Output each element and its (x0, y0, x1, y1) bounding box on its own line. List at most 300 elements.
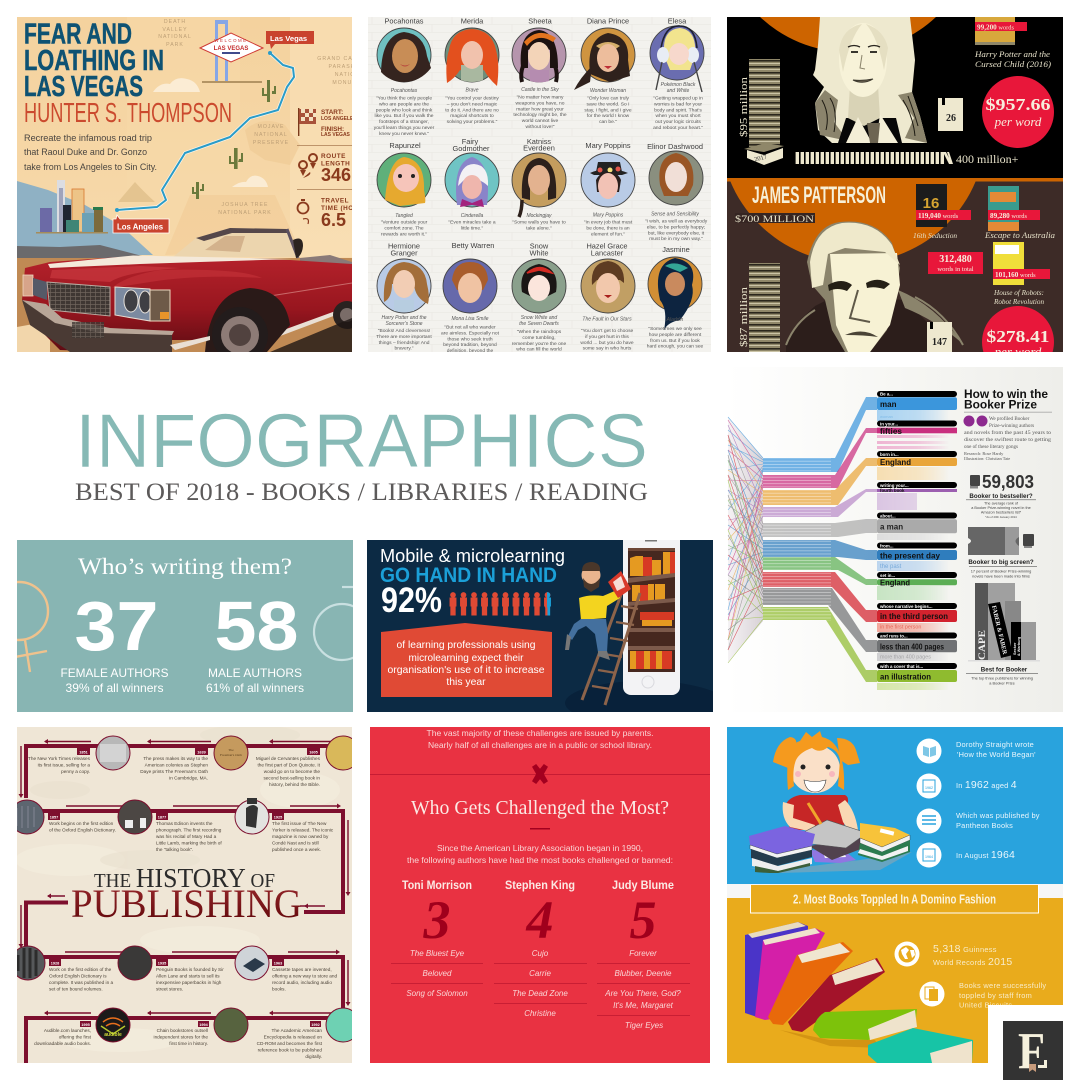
book stack: Rowling sales (794, 152, 1019, 166)
answer rows: and runs to... (880, 633, 908, 638)
intro: one of these literary gongs (964, 443, 1018, 450)
column: Judy Blume: Blubber, Deenie (615, 969, 672, 978)
record stats: toppled by staff from (959, 991, 1032, 1000)
wheel (205, 288, 290, 352)
quotes: must be in my own way." (649, 236, 703, 242)
film titles: Mockingjay (526, 213, 552, 219)
map labels: NATIONAL (158, 34, 192, 40)
answer rows: fourth book (880, 488, 905, 493)
map labels (158, 19, 358, 216)
character names: Godmother (453, 144, 490, 153)
answer rows: less than 400 pages (880, 642, 944, 652)
female count: 37 (74, 587, 158, 665)
year tags and events: street stores. (156, 986, 183, 992)
cacti (192, 80, 276, 199)
legend: stats: 6.5 (321, 210, 346, 230)
books: House of Robots: 101,160 words (995, 271, 1036, 279)
year tags and events: Cassette tapes are invented, (272, 967, 332, 972)
stat 59,803: Booker to bestseller? (969, 493, 1033, 500)
Mary Poppins (590, 169, 628, 175)
year tags and events: its first issue, selling for a (38, 762, 90, 768)
year tags and events: Little Lamb, marking the birth of (156, 840, 222, 846)
year tags and events: downloadable audio books. (34, 1041, 91, 1046)
year tags and events: The press makes its way to the (143, 756, 208, 761)
column: Toni Morrison (391, 880, 483, 998)
quotes: some say in who hurts (583, 346, 632, 352)
quotes: without love!" (526, 124, 555, 130)
publishers bar chart: a Booker Prize (989, 680, 1015, 686)
heading: Who Gets Challenged the Most? (411, 797, 669, 819)
film titles: Tangled (395, 213, 413, 219)
map labels: JOSHUA TREE (222, 202, 268, 208)
answer rows (877, 391, 957, 682)
title: FEAR AND (24, 18, 132, 50)
year tags and events: 1963 (274, 962, 282, 966)
answer rows: the present day (880, 552, 941, 560)
legend: stats: LAS VEGAS (321, 132, 351, 138)
Snow White (521, 264, 557, 296)
title: LAS VEGAS (24, 71, 143, 103)
quotes: can be." (599, 119, 617, 125)
legend: stats: START: (321, 109, 343, 116)
film titles: Snow White and (521, 315, 557, 321)
legend: stats: LENGTH (321, 160, 350, 168)
panel: The History of Publishing (17, 727, 352, 1063)
total words: 312,480 (939, 254, 972, 265)
character names: Snow (530, 242, 549, 250)
column: Judy Blume: Are You There, God? (604, 989, 681, 998)
answer rows: the past (880, 564, 902, 570)
year tags and events: Work on the first edition of the (49, 967, 112, 972)
route (117, 53, 294, 210)
year tags and events: inexpensive paperbacks in high (156, 980, 222, 985)
logo badge: F (1018, 1023, 1045, 1080)
per-word value: Patterson: per word (994, 344, 1042, 359)
publishers bar chart: Best for Booker (981, 666, 1028, 674)
callout: microlearning expect their (408, 653, 524, 664)
record stats: 5,318 Guinness (933, 943, 997, 955)
column: Stephen King: The Dead Zone (512, 989, 568, 998)
Diana Prince (589, 33, 630, 82)
film titles: Pokémon Black (661, 82, 696, 88)
film titles: Wonder Woman (590, 88, 626, 94)
quotes: things – friendship! And (379, 340, 430, 346)
quotes: you'll learn things you never (374, 125, 435, 131)
character names (384, 16, 703, 258)
toppling books (745, 922, 973, 1063)
column: Judy Blume: Forever (629, 949, 657, 958)
map labels: PARASH (329, 64, 355, 70)
answer rows: born in... (880, 452, 899, 457)
character names: Katniss (527, 137, 551, 146)
column: Judy Blume: It's Me, Margaret (613, 1001, 674, 1010)
character names: Granger (390, 248, 418, 258)
male count: 58 (214, 587, 298, 665)
money stack 2017 (739, 59, 784, 165)
year tags and events: Allen Lane and starts to sell its (156, 974, 220, 978)
fading alternative answers (877, 410, 946, 690)
map labels: MOJAVE (258, 124, 284, 130)
panel: The History of Publishing: The (228, 748, 234, 752)
character names: Fairy (462, 137, 479, 146)
quotes: – you don't need magic (447, 101, 498, 107)
quotes: if you get hurt in this (585, 334, 629, 340)
per-word value: Rowling: $957.66 (986, 95, 1050, 114)
panel: domino books (yellow) (727, 884, 1063, 1063)
quotes: to do it. And there are no (445, 107, 499, 113)
year tags and events: 1877 (158, 816, 166, 820)
female count: 39% of all winners (66, 681, 164, 695)
Las Vegas pin: Las Vegas (270, 34, 307, 43)
answer rows: England (880, 578, 910, 588)
quotes: "No matter how many (517, 94, 564, 100)
icon: X mark (533, 765, 547, 783)
answer rows: writing your... (879, 483, 909, 488)
people row (450, 593, 550, 615)
flow fan lines (728, 417, 763, 663)
year tags and events: 1995 (81, 1023, 90, 1027)
panel: Mobile and microlearning: GO HAND IN HAND (380, 564, 557, 587)
quotes: remember you're the one (512, 341, 567, 347)
clouds (153, 78, 200, 92)
column: Stephen King: Cujo (532, 949, 549, 958)
quotes: "You control your destiny (445, 96, 499, 102)
Elinor (659, 153, 693, 196)
heading (964, 387, 1048, 412)
Patterson wealth (735, 213, 815, 225)
Los Angeles pin: Los Angeles (117, 222, 164, 232)
character names: Everdeen (523, 144, 555, 152)
map labels: GRAND CA (317, 56, 353, 62)
film titles: Pocahontas (391, 88, 418, 94)
column: Stephen King: Carrie (529, 969, 551, 978)
Cursed Child book (974, 17, 1051, 69)
year tags and events: would go on to become the (264, 769, 320, 774)
quotes: come tumbling, (522, 335, 556, 341)
year tags and events: reference book to be published (258, 1048, 322, 1052)
quotes: who are people are the (379, 101, 429, 107)
year tags and events: 1928 (51, 962, 59, 966)
character names: Diana Prince (587, 16, 629, 26)
timeline arrowheads (18, 739, 350, 1016)
column: Toni Morrison: 3 (422, 890, 450, 950)
book stack: Rowling sales: 400 million+ (956, 152, 1019, 166)
quotes: "Sometimes we only see (648, 326, 702, 332)
callout (381, 623, 552, 697)
year tags and events: digitally. (305, 1054, 322, 1059)
quotes: world cannot live (522, 118, 558, 124)
year tags and events: The Academic American (271, 1028, 322, 1033)
year tags and events: published once a week. (272, 847, 321, 852)
year tags and events: 1994 (199, 1023, 209, 1027)
quotes: out your logic circuits (655, 119, 701, 125)
books: 16th Seduction: 16 (923, 195, 939, 212)
year tags and events: first time in history. (169, 1041, 208, 1046)
publishers bar chart: FABER & FABER (990, 605, 1008, 656)
year tags and events: The first issue of The New (272, 821, 327, 826)
year tags and events: 1605 (309, 750, 318, 754)
quotes: "In every job that must (584, 220, 633, 226)
answer rows: woman (880, 414, 893, 419)
panel: heroines quotes (368, 16, 711, 354)
Cursed Child book: Harry Potter and the (974, 49, 1050, 59)
skyline (36, 180, 108, 234)
quotes: knew you never knew." (379, 131, 429, 137)
year tags and events: books. (272, 986, 286, 992)
title: PUBLISHING (71, 881, 302, 926)
quotes: like you. But if you walk the (374, 113, 434, 119)
money stack (739, 263, 780, 352)
quotes: "Getting wrapped up in (653, 96, 703, 102)
map labels: DEATH (164, 19, 186, 25)
publishers bar chart: Secker (1013, 642, 1017, 655)
stat 59,803: Amazon bestsellers list* (981, 510, 1022, 514)
panel: Who's writing them (17, 540, 353, 712)
year tags and events: offering a new way to store and (272, 974, 337, 978)
year tags and events: Yorker is released. The iconic (272, 828, 334, 832)
intro text: The vast majority of these challenges are issued by parents. (426, 728, 654, 738)
quotes: magical shortcuts to (450, 113, 494, 119)
year tags and events: set of ten bound volumes. (49, 986, 103, 992)
quotes: worries is bad for your (654, 101, 702, 107)
film titles: the Seven Dwarfs (519, 321, 559, 327)
film titles: Brave (465, 88, 479, 94)
legend: stats: FINISH: (321, 126, 344, 133)
intro: discover the swiftest route to getting (964, 436, 1052, 443)
quotes: how people are different (649, 332, 702, 338)
book count 147 (927, 322, 952, 352)
timeline thin arrows (21, 742, 348, 1013)
year tags and events: The New York Times releases (28, 756, 91, 761)
publishers bar chart: CAPE (978, 630, 988, 660)
answer rows: more than 400 pages (880, 654, 931, 660)
callout: this year (446, 677, 486, 688)
character names: White (530, 248, 548, 258)
man on ladder (565, 562, 640, 705)
legend: stats: 346 (321, 165, 351, 185)
quotes: comfort zone. The (384, 225, 424, 231)
publishers bar chart: & Warburg (1017, 636, 1021, 656)
character names: Sheeta (528, 16, 553, 26)
Hazel Grace (592, 261, 624, 285)
Sheeta (521, 30, 558, 68)
column: Stephen King: Christine (524, 1009, 556, 1018)
year tags and events: the first part of Don Quixote. It (257, 762, 321, 768)
quotes: but, like everybody else, it (648, 230, 705, 236)
answer rows: an illustration (880, 672, 931, 682)
books: 16th Seduction: 16th Seduction (913, 231, 957, 240)
film titles: The Fault in Our Stars (582, 316, 632, 322)
stat 59,803: The average rank of (984, 502, 1019, 506)
info list: In August 1964 (956, 849, 1015, 861)
quotes: There are more important (376, 334, 432, 340)
answer rows: set in... (880, 573, 895, 578)
quotes: take alone." (526, 225, 552, 231)
James Patterson portrait (786, 221, 963, 352)
female count (60, 587, 168, 695)
quotes: body and spirit. That's (654, 107, 702, 113)
year tags and events: record audio, including audio (272, 980, 332, 985)
legend: stats (297, 108, 371, 230)
record stats (894, 942, 1046, 1010)
panel: Mobile and microlearning (367, 540, 713, 712)
column: Judy Blume: Tiger Eyes (625, 1021, 663, 1030)
map labels: NATIO (335, 72, 355, 78)
quotes: who can fill the world (516, 347, 562, 353)
publishers bar chart (966, 583, 1040, 686)
Welcome to Las Vegas sign: LAS VEGAS (214, 46, 248, 52)
Las Vegas pin (266, 31, 314, 49)
quotes: "Some walls you have to (512, 220, 566, 226)
film titles: Harry Potter and the (381, 315, 427, 321)
year tags and events: Audible.com launches, (44, 1028, 91, 1033)
timeline photos (10, 736, 360, 1042)
title (71, 863, 302, 926)
Cursed Child book: 99,200 words (977, 24, 1014, 32)
character names: Pocahontas (384, 16, 424, 26)
year tags and events: phonograph. The first recording (156, 828, 222, 832)
logo badge (988, 1005, 1063, 1080)
publishers bar chart: The top three publishers for winning (971, 676, 1033, 680)
year tags and events: Oxford English Dictionary is (49, 974, 107, 978)
year tags and events: offering the first (59, 1034, 92, 1040)
column: Stephen King: 4 (526, 890, 554, 950)
money stack 2017: $95 million (739, 76, 750, 137)
column: Toni Morrison: Beloved (423, 969, 452, 978)
timeline path (17, 744, 352, 1063)
panel: youngest author (blue) (727, 727, 1063, 884)
film titles (381, 82, 699, 327)
books: 16th Seduction (913, 184, 971, 240)
character names: Hazel Grace (586, 242, 628, 250)
Elesa (664, 28, 695, 70)
Welcome to Las Vegas sign (200, 20, 263, 83)
subtitle: BEST OF 2018 - BOOKS / LIBRARIES / READING (75, 479, 648, 506)
character names: Mary Poppins (585, 141, 631, 150)
year tags and events: 1935 (158, 962, 166, 966)
answer rows: fifties (880, 427, 903, 436)
info list: 1964 (925, 855, 933, 859)
year tags and events: 1851 (79, 750, 88, 754)
blue hills (17, 181, 153, 255)
year tags and events: Daye prints The Freeman's Oath (140, 769, 208, 774)
legend: stats: LOS ANGELES (321, 116, 357, 122)
author: HUNTER S. THOMPSON (24, 97, 232, 128)
character names: Elesa (668, 16, 687, 26)
answer rows: Be a... (880, 392, 893, 397)
book count 147: 147 (932, 337, 947, 348)
answer rows: about... (880, 513, 896, 518)
J.K. Rowling portrait (813, 17, 927, 143)
film titles: and White (667, 88, 689, 94)
intro text (24, 132, 157, 172)
books: 16th Seduction: 119,040 words (918, 212, 959, 220)
column: Toni Morrison: The Bluest Eye (410, 949, 465, 958)
info list: Pantheon Books (956, 821, 1013, 830)
year tags and events: Penguin Books is founded by Sir (156, 967, 224, 972)
convertible car (22, 228, 361, 363)
info list: Which was published by (956, 811, 1040, 820)
per-word value: Patterson (982, 306, 1054, 378)
total words (928, 252, 983, 274)
character names: Elinor Dashwood (647, 142, 703, 151)
Katniss (522, 158, 556, 200)
character names: Lancaster (591, 248, 624, 258)
per-word value: Patterson: $278.41 (986, 327, 1050, 346)
character names: Merida (461, 16, 484, 26)
male count: 61% of all winners (206, 681, 304, 695)
per-word value: Rowling (982, 76, 1054, 148)
big screen ticket: 17 percent of Booker Prize-winning (971, 568, 1031, 574)
Merida (446, 29, 498, 86)
answer rows: England (880, 458, 911, 467)
quotes: be done, there is an (586, 225, 630, 231)
quotes: bravery." (394, 346, 414, 352)
map labels: NATIONAL (254, 132, 288, 138)
heading: How to win the (964, 387, 1048, 401)
answer rows: from... (880, 543, 893, 548)
quotes: "Books! And cleverness! (378, 328, 430, 334)
quotes: weapons you have, no (516, 100, 565, 106)
intro text: Nearly half of all challenges are in a public or school library. (428, 740, 652, 750)
title (24, 18, 164, 103)
quotes: "You don't get to choose (581, 328, 634, 334)
quotes (374, 94, 708, 354)
year tags and events: American colonies as Stephen (145, 762, 208, 768)
girl writing illustration (749, 731, 912, 873)
character names: Betty Warren (452, 241, 494, 250)
icon: female symbol (0, 582, 48, 672)
total words: words in total (937, 266, 974, 273)
film titles: Cinderella (461, 213, 483, 219)
books: Escape to Australia: 89,280 words (990, 212, 1027, 220)
intro text (426, 728, 654, 750)
legend: stats: TRAVEL (321, 198, 349, 204)
column: Judy Blume: Judy Blume (612, 880, 674, 892)
panel: The History of Publishing: audible (104, 1032, 122, 1038)
intro: Research: Rose Hardy (964, 451, 1004, 456)
intro: Illustration: Christian Tate (964, 456, 1010, 461)
quotes: matter how great your (516, 106, 564, 112)
Jasmine (658, 258, 693, 330)
year tags and events: Condé Nast and is still (272, 840, 319, 846)
year tags and events: Chain bookstores outsell (157, 1028, 208, 1033)
Pocahontas (381, 32, 431, 82)
side trim (267, 305, 352, 341)
quotes: "Even miracles take a (448, 220, 496, 226)
year tags and events: independent stores for the (154, 1034, 208, 1040)
book count 26: 26 (946, 113, 956, 124)
year tags and events: CD-ROM and becomes the first (257, 1041, 323, 1046)
info list: In 1962 aged 4 (956, 779, 1017, 791)
flow bands (763, 397, 877, 682)
column: Judy Blume (597, 880, 690, 1030)
year tags and events: complete. It was published in a (49, 980, 113, 985)
quotes: when you must short (655, 113, 701, 119)
Rapunzel (385, 157, 425, 206)
quotes: save the world. So I (587, 101, 629, 107)
map labels: PRESERVE (253, 140, 289, 146)
record stats: World Records 2015 (933, 956, 1013, 968)
quotes: "Only love can truly (587, 96, 630, 102)
Fairy Godmother (456, 157, 488, 205)
Cursed Child book: Cursed Child (2016) (975, 59, 1051, 69)
Patterson wealth: $700 MILLION (735, 214, 814, 225)
year tags and events: the "talking book". (156, 847, 193, 852)
quotes: technology might be, the (513, 112, 567, 118)
intro text: that Raoul Duke and Dr. Gonzo (24, 146, 147, 157)
quotes: solving your problems." (447, 119, 498, 125)
